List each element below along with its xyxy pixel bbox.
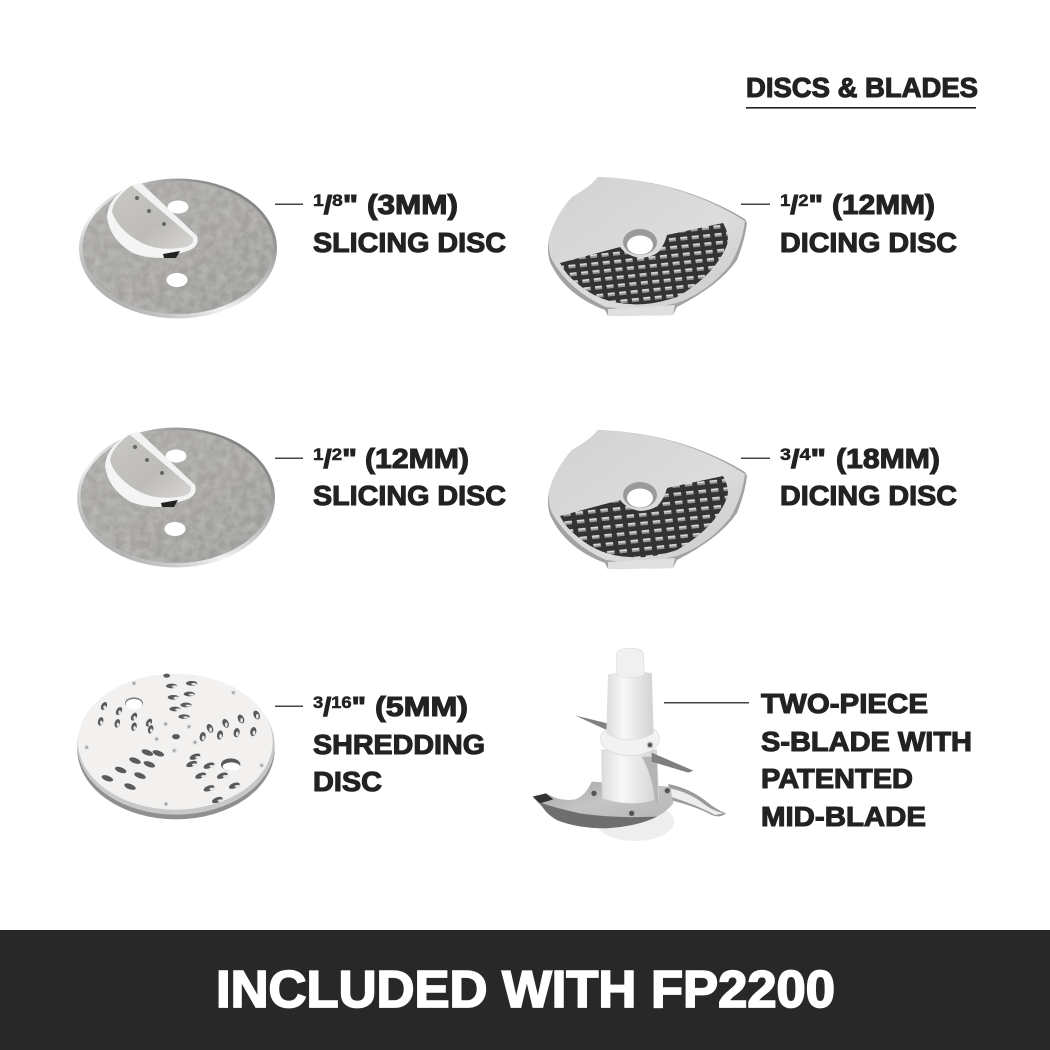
label: 3/4 inch 18mm dicing disc: DICING DISC [780,480,957,511]
leader line [741,204,770,205]
label: 1/2 inch 12mm slicing disc [313,443,506,511]
label: 3/16 inch 5mm shredding disc: " [352,691,366,722]
leader line [275,706,303,707]
leader line [275,458,303,459]
label: 1/2 inch 12mm dicing disc: 1 [780,191,790,210]
icon: dicing disc 12mm [548,177,747,316]
label: 3/16 inch 5mm shredding disc: 16 [331,693,352,712]
label: two-piece s-blade with patented mid-blade: MID-BLADE [761,801,926,832]
label: 1/2 inch 12mm slicing disc: 1 [313,445,324,464]
label: two-piece s-blade with patented mid-blade: TWO-PIECE [761,688,928,719]
label: 3/4 inch 18mm dicing disc: 4 [799,445,811,464]
label: 1/2 inch 12mm dicing disc [780,189,957,258]
icon: s-blade [533,648,726,841]
label: 1/2 inch 12mm slicing disc: (12MM) [365,443,469,474]
icon: shredding disc [77,674,275,819]
label: two-piece s-blade with patented mid-blade: PATENTED [761,763,913,794]
label: 3/4 inch 18mm dicing disc: / [791,444,799,474]
label: 3/4 inch 18mm dicing disc: 3 [780,445,791,464]
label: 1/8 inch 3mm slicing disc: / [324,190,332,220]
label: 1/2 inch 12mm dicing disc: " [809,189,823,220]
label: 1/2 inch 12mm slicing disc: " [342,443,357,474]
label: 3/16 inch 5mm shredding disc [313,691,485,797]
item: 3/16 inch shredding disc [77,674,485,819]
item: 1/8 inch slicing disc [79,178,506,318]
label: 3/16 inch 5mm shredding disc: 3 [313,693,323,712]
footer title: INCLUDED WITH FP2200 [216,961,835,1019]
label: 3/4 inch 18mm dicing disc: " [811,443,826,474]
label: 1/2 inch 12mm dicing disc: / [790,190,798,220]
icon: slicing disc 3mm [79,178,277,318]
label: 1/8 inch 3mm slicing disc: (3MM) [367,189,458,220]
label: two-piece s-blade with patented mid-blade [761,688,972,832]
item: 1/2 inch slicing disc [77,428,506,568]
label: 3/4 inch 18mm dicing disc: (18MM) [836,443,940,474]
label: 1/8 inch 3mm slicing disc: 1 [313,191,324,210]
label: 1/2 inch 12mm dicing disc: DICING DISC [780,227,957,258]
leader line [741,458,770,459]
label: 3/16 inch 5mm shredding disc: (5MM) [375,691,468,722]
label: 1/2 inch 12mm dicing disc: 2 [798,191,809,210]
icon: slicing disc 12mm [77,428,275,568]
label: 3/16 inch 5mm shredding disc: DISC [313,766,382,797]
leader line [664,702,749,704]
heading: discs and blades: DISCS & BLADES [746,72,978,103]
label: 1/8 inch 3mm slicing disc: 8 [332,191,343,210]
label: 1/8 inch 3mm slicing disc: SLICING DISC [313,227,506,258]
label: 3/16 inch 5mm shredding disc: SHREDDING [313,729,485,760]
label: 1/8 inch 3mm slicing disc: " [343,189,358,220]
label: 1/2 inch 12mm dicing disc: (12MM) [832,189,935,220]
item: two-piece s-blade [533,648,972,841]
label: 3/16 inch 5mm shredding disc: / [323,692,331,722]
label: two-piece s-blade with patented mid-blade: S-BLADE WITH [761,726,972,757]
item: 1/2 inch dicing disc [548,177,957,316]
leader line [275,204,303,205]
label: 3/4 inch 18mm dicing disc [780,443,957,511]
icon: dicing disc 18mm [548,430,747,569]
label: 1/8 inch 3mm slicing disc [313,189,506,258]
label: 1/2 inch 12mm slicing disc: 2 [332,445,342,464]
item: 3/4 inch dicing disc [548,430,957,569]
label: 1/2 inch 12mm slicing disc: SLICING DISC [313,480,506,511]
label: 1/2 inch 12mm slicing disc: / [324,444,332,474]
footer banner [0,930,1050,1050]
